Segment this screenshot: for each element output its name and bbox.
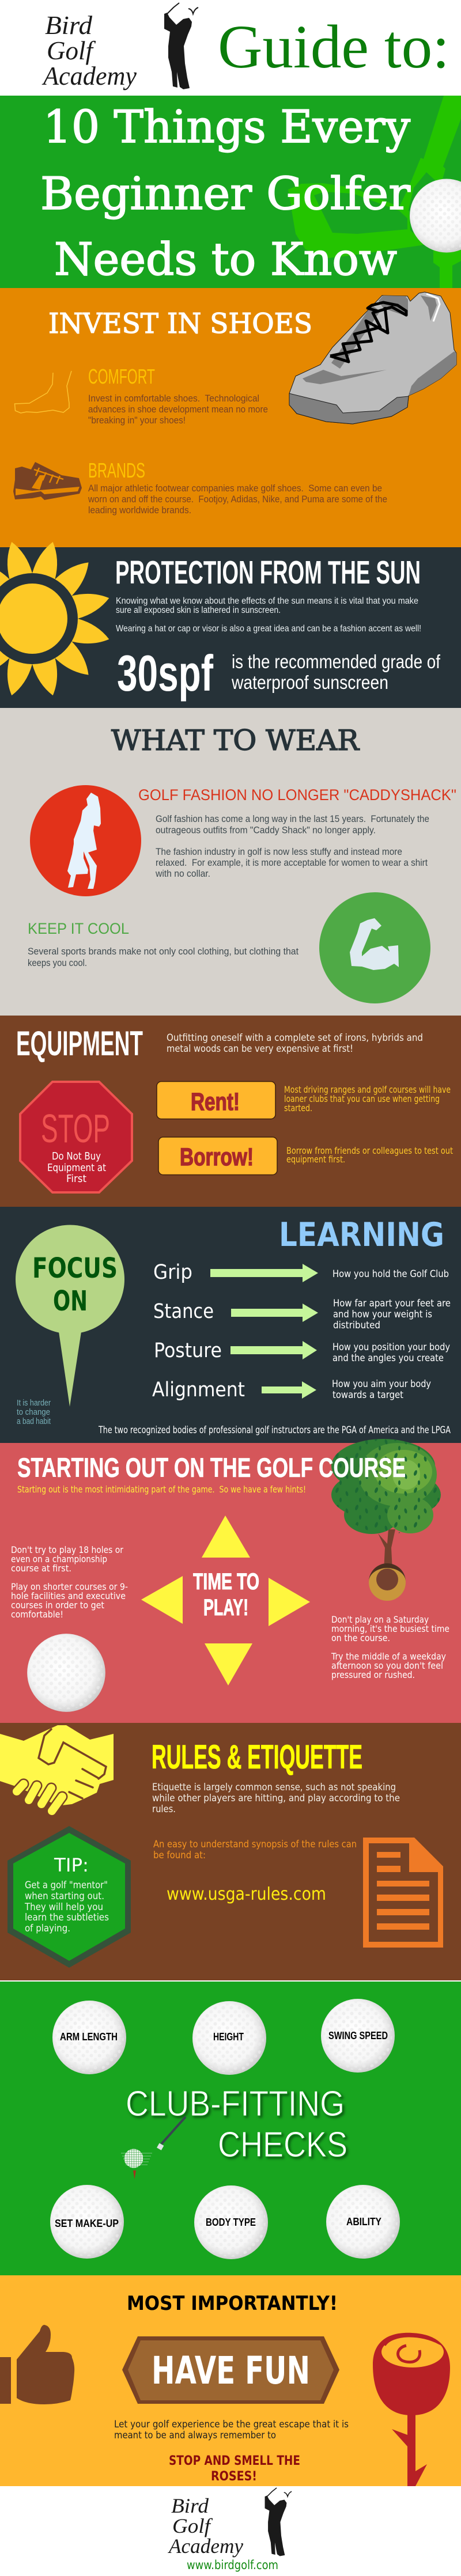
callout: tip hexagon: of playing.: [25, 1923, 70, 1934]
text: synopsis: [153, 1839, 357, 1861]
logo: Bird Golf Academy: Bird: [45, 11, 93, 40]
callout: tip hexagon: when starting out.: [25, 1891, 104, 1902]
logo: footer Bird Golf Academy: [168, 2488, 292, 2558]
text: brands body: All major athletic footwear companies make golf shoes. Some can even be: [88, 483, 382, 494]
row: alignment: towards a target: [332, 1389, 403, 1400]
text: rent description: started.: [284, 1103, 312, 1113]
text: borrow description: equipment first.: [286, 1154, 345, 1165]
text: have fun body: [114, 2419, 349, 2441]
text: bad habit note: to change: [17, 1407, 50, 1417]
text: have fun body: meant to be and always remember to: [114, 2430, 276, 2441]
ball: body type: BODY TYPE: [206, 2217, 256, 2228]
icon: thumbs up: [0, 2325, 74, 2404]
text: synopsis: be found at:: [153, 1850, 206, 1861]
text: left hints: even on a championship: [11, 1554, 107, 1564]
text: right hints: [331, 1614, 449, 1680]
text: stop and smell the roses: STOP AND SMELL THE: [169, 2454, 300, 2468]
panel: learning background: [0, 1207, 461, 1443]
logo: Bird Golf Academy: Golf: [47, 36, 96, 65]
text: left hints: [11, 1544, 128, 1620]
callout: tip hexagon: [7, 1826, 131, 1968]
title text: [40, 101, 411, 286]
text: time to play: [193, 1569, 259, 1620]
ball: ability: [326, 2185, 400, 2259]
text: comfort body: advances in shoe development mean no more: [88, 404, 268, 415]
button: rent: [157, 1082, 275, 1119]
button: rent: Rent!: [191, 1088, 240, 1116]
row: posture: and the angles you create: [332, 1353, 444, 1363]
ball: arm length: ARM LENGTH: [60, 2031, 118, 2043]
ball: set make-up: SET MAKE-UP: [55, 2218, 119, 2229]
heading: Guide to: Guide to:: [218, 13, 449, 81]
heading: comfort: COMFORT: [88, 365, 155, 388]
callout: tip hexagon: They will help you: [24, 1901, 103, 1913]
icon: brown shoe: [13, 462, 82, 500]
text: bad habit note: It is harder: [17, 1398, 51, 1408]
text: spf caption: waterproof sunscreen: [231, 672, 388, 693]
text: brands body: leading worldwide brands.: [88, 505, 191, 516]
heading: club-fitting checks: [126, 2084, 347, 2165]
logo: footer Bird Golf Academy: Academy: [168, 2535, 243, 2558]
panel: title green band: [0, 96, 461, 288]
text: keep it cool body: keeps you cool.: [28, 957, 87, 968]
text: golf fashion body: Golf fashion has come a long way in the last 15 years. Fortunately the: [156, 813, 429, 824]
illustration: golf ball: [410, 179, 461, 252]
text: right hints: Try the middle of a weekday: [331, 1651, 446, 1662]
text: left hints: courses in order to get: [11, 1600, 104, 1611]
icon: rose: [373, 2333, 450, 2486]
text: sun body: [116, 596, 421, 634]
panel: header white band: [0, 0, 461, 96]
panel: starting out background: [0, 1443, 461, 1723]
text: comfort body: "breaking in" your shoes!: [88, 415, 186, 426]
row: grip: How you hold the Golf Club: [332, 1268, 449, 1279]
text: brands body: worn on and off the course. Footjoy, Adidas, Nike, and Puma are some of the: [88, 494, 387, 505]
logo: footer Bird Golf Academy: Bird: [171, 2494, 209, 2517]
icon: woman silhouette in red circle: [30, 785, 141, 896]
title text: 10 Things Every: [43, 101, 410, 153]
text: left hints: Don't try to play 18 holes or: [11, 1544, 123, 1555]
icon: focus on golf tee: ON: [53, 1285, 88, 1317]
row: alignment: [152, 1378, 431, 1401]
row: stance: How far apart your feet are: [333, 1298, 451, 1309]
text: synopsis: An easy to understand synopsis of the rules can: [153, 1839, 357, 1850]
row: alignment: Alignment: [152, 1378, 245, 1401]
icon: stop sign: Do Not Buy: [52, 1150, 101, 1162]
icon: stop sign: STOP: [41, 1106, 110, 1151]
heading: brands: BRANDS: [88, 459, 145, 482]
text: bad habit note: [17, 1398, 51, 1426]
icon: flexed arm in green circle: [319, 892, 430, 1003]
icon: four yellow arrows: [141, 1516, 310, 1685]
icon: stop sign: First: [66, 1173, 86, 1185]
text: equipment intro: Outfitting oneself with a complete set of irons, hybrids and: [167, 1032, 423, 1044]
icon: document: [363, 1838, 443, 1948]
icon: handshake: [0, 1725, 114, 1811]
illustration: golf club and tee: [288, 96, 461, 288]
heading: equipment: EQUIPMENT: [16, 1024, 143, 1063]
ball: ability: ABILITY: [346, 2216, 381, 2228]
row: grip: Grip: [153, 1261, 192, 1284]
text: golf fashion body: with no collar.: [155, 868, 210, 879]
text: etiquette body: while other players are hitting, and play according to the: [152, 1793, 400, 1804]
row: stance: and how your weight is: [333, 1309, 432, 1320]
ball: set make-up: [50, 2185, 124, 2259]
row: posture: Posture: [154, 1339, 222, 1362]
illustration: golf ball: [27, 1634, 105, 1712]
heading: most importantly: MOST IMPORTANTLY!: [127, 2292, 338, 2315]
row: posture: [154, 1339, 450, 1363]
text: time to play: TIME TO: [193, 1569, 259, 1594]
panel: equipment background: [0, 1016, 461, 1207]
text: comfort body: Invest in comfortable shoes. Technological: [88, 393, 259, 404]
illustration: large grey shoe: [289, 292, 456, 424]
ball: height: HEIGHT: [213, 2031, 244, 2043]
heading: club-fitting checks: CHECKS: [218, 2125, 347, 2165]
ball: swing speed: SWING SPEED: [328, 2030, 388, 2041]
text: equipment intro: metal woods can be very expensive at first!: [167, 1043, 353, 1055]
text: spf caption: [231, 651, 441, 693]
text: keep it cool body: [28, 946, 298, 968]
text: bad habit note: a bad habit: [17, 1416, 51, 1426]
logo: footer Bird Golf Academy: Golf: [172, 2514, 213, 2537]
link: birdgolf website: www.birdgolf.com: [187, 2558, 278, 2572]
text: left hints: comfortable!: [11, 1609, 63, 1620]
panel: club-fitting background: [0, 1982, 461, 2275]
panel: invest in shoes background: [0, 288, 461, 547]
text: right hints: Don't play on a Saturday: [331, 1614, 429, 1625]
row: alignment: How you aim your body: [332, 1378, 431, 1389]
text: brands body: [88, 483, 387, 516]
text: keep it cool body: Several sports brands make not only cool clothing, but clothing that: [28, 946, 298, 957]
text: time to play: PLAY!: [203, 1595, 248, 1620]
text: right hints: pressured or rushed.: [331, 1669, 415, 1680]
text: golf fashion body: The fashion industry in golf is now less stuffy and instead more: [156, 846, 402, 857]
text: sun body: Wearing a hat or cap or visor is also a great idea and can be a fashion accent as well!: [116, 624, 421, 634]
sign: have fun: [122, 2336, 339, 2404]
text: stop and smell the roses: [169, 2454, 300, 2484]
button: borrow: Borrow!: [180, 1143, 254, 1171]
text: left hints: Play on shorter courses or 9-: [11, 1581, 128, 1592]
text: etiquette body: Etiquette is largely common sense, such as not speaking: [152, 1782, 396, 1793]
text: right hints: afternoon so you don't feel: [331, 1660, 443, 1671]
icon: focus on golf tee: [16, 1225, 124, 1407]
icon: sun: [0, 539, 112, 699]
link: usga rules: www.usga-rules.com: [167, 1884, 326, 1904]
ball: swing speed: [321, 1999, 395, 2073]
text: right hints: on the course.: [331, 1632, 390, 1643]
heading: invest in shoes: INVEST IN SHOES: [48, 308, 312, 340]
text: stop and smell the roses: ROSES!: [211, 2469, 257, 2484]
text: golf fashion body: relaxed. For example, it is more acceptable for women to wear a shirt: [156, 857, 428, 868]
icon: focus on golf tee: FOCUS: [32, 1252, 118, 1285]
sign: have fun: HAVE FUN: [152, 2348, 310, 2393]
text: comfort body: [88, 393, 268, 426]
subheading: keep it cool: KEEP IT COOL: [28, 920, 129, 937]
ball: body type: [194, 2185, 268, 2259]
icon: stop sign: [20, 1082, 132, 1192]
row: stance: [153, 1298, 451, 1331]
button: borrow: [158, 1137, 277, 1175]
row: stance: distributed: [333, 1320, 380, 1331]
callout: tip hexagon: learn the subtleties: [25, 1912, 109, 1923]
text: etiquette body: rules.: [152, 1804, 176, 1815]
callout: tip hexagon: Get a golf "mentor": [25, 1880, 108, 1891]
text: starting out intro: Starting out is the most intimidating part of the game. So we have a few hints!: [17, 1484, 306, 1495]
panel: rules background: [0, 1723, 461, 1980]
illustration: tree: [331, 1439, 441, 1601]
text: sun body: Knowing what we know about the effects of the sun means it is vital that you make: [116, 596, 418, 606]
text: etiquette body: [152, 1782, 400, 1815]
title text: Beginner Golfer: [40, 168, 411, 220]
logo: Bird Golf Academy: [41, 3, 198, 90]
text: equipment intro: [167, 1032, 423, 1055]
ball: arm length: [52, 2001, 126, 2074]
text: left hints: course at first.: [11, 1563, 71, 1574]
logo: Bird Golf Academy: Academy: [41, 62, 137, 90]
title text: Needs to Know: [54, 234, 397, 286]
icon: stop sign: Equipment at: [47, 1162, 106, 1174]
stat: 30spf: 30spf: [117, 645, 213, 702]
text: golf fashion body: [155, 813, 429, 879]
text: have fun body: Let your golf experience be the great escape that it is: [114, 2419, 349, 2430]
row: grip: [153, 1261, 449, 1284]
heading: club-fitting checks: CLUB-FITTING: [126, 2084, 345, 2124]
panel: sun protection background: [0, 547, 461, 708]
text: golf fashion body: outrageous outfits from "Caddy Shack" no longer apply.: [156, 825, 376, 835]
text: sun body: sure all exposed skin is lathered in sunscreen.: [116, 605, 281, 615]
text: borrow description: [286, 1145, 453, 1165]
text: rent description: [284, 1084, 451, 1113]
row: stance: Stance: [153, 1300, 214, 1323]
panel: what to wear background: [0, 708, 461, 1016]
panel: most importantly background: [0, 2275, 461, 2486]
icon: foot outline: [15, 371, 71, 413]
text: left hints: hole facilities and executive: [11, 1590, 126, 1601]
icon: club, ball and tee: [121, 2117, 186, 2179]
ball: height: [192, 2001, 266, 2075]
callout: tip hexagon: TIP:: [54, 1854, 89, 1876]
heading: what to wear: WHAT TO WEAR: [111, 724, 360, 757]
